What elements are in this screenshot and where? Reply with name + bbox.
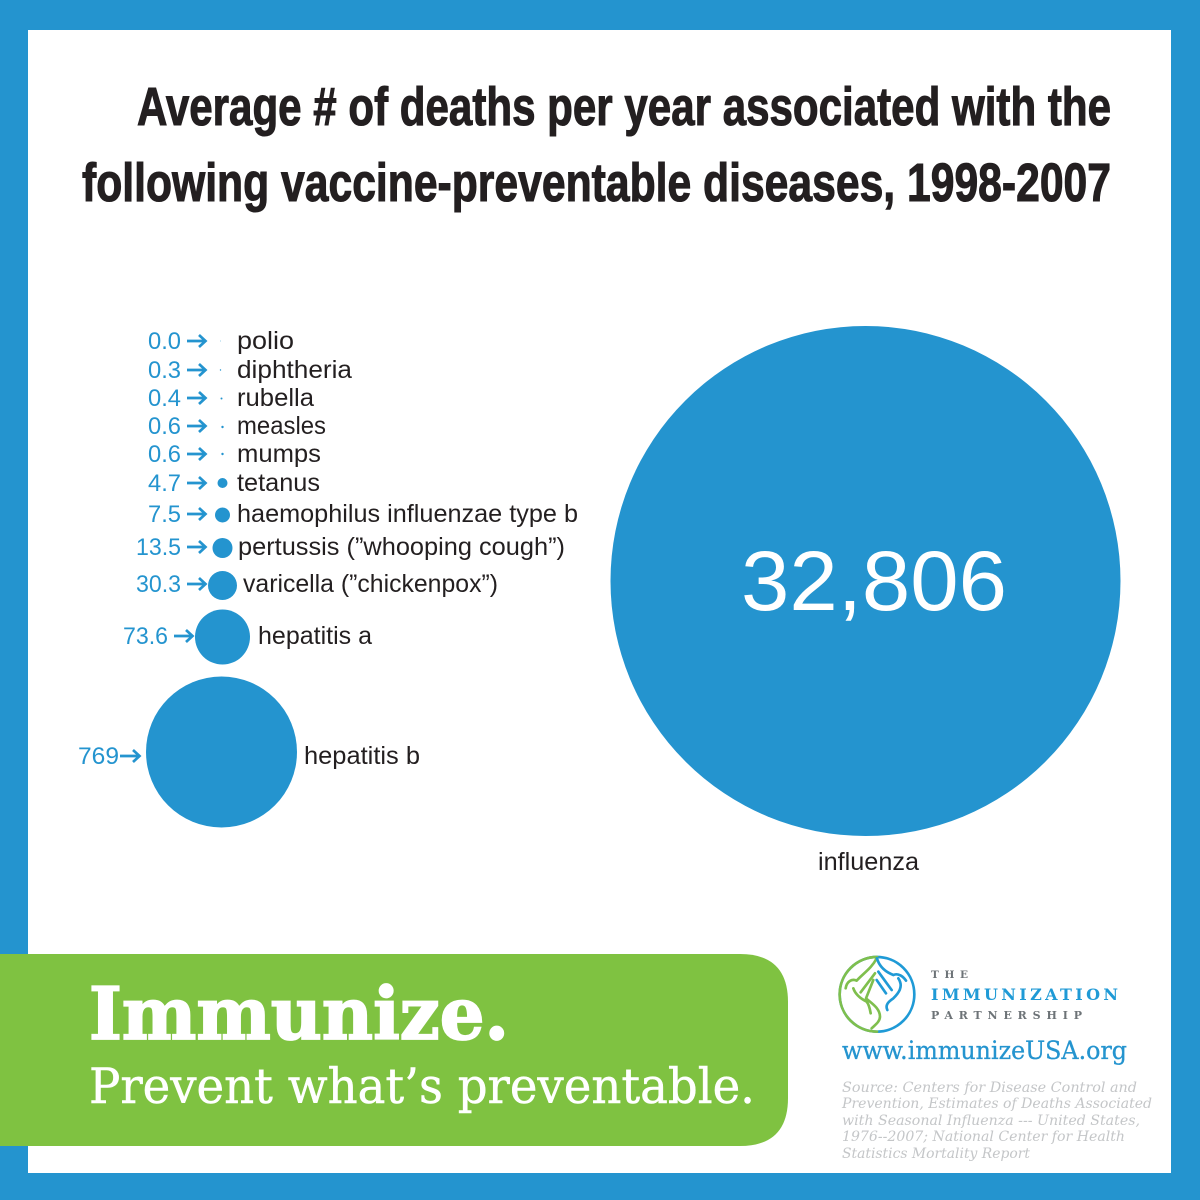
row: tetanus — [148, 469, 320, 497]
row: rubella: 0.4 — [148, 385, 181, 412]
logo wordmark: PARTNERSHIP — [931, 1009, 1082, 1022]
row: diphtheria: 0.3 — [148, 357, 181, 384]
row: varicella: 30.3 — [136, 571, 181, 598]
bubble: influenza: 32,806 — [741, 534, 1007, 628]
source note: Prevention, Estimates of Deaths Associated — [841, 1096, 1152, 1112]
source note: with Seasonal Influenza --- United States, — [842, 1113, 1140, 1129]
row: hepatitis b: 769 — [78, 743, 119, 770]
slogan text — [89, 971, 755, 1115]
label: influenza: influenza — [818, 848, 919, 876]
row: polio — [148, 327, 294, 355]
row: measles — [148, 412, 326, 440]
logo wordmark: IMMUNIZATION — [931, 985, 1118, 1004]
row: rubella — [148, 384, 314, 412]
logo icon: hands and leaf — [840, 957, 914, 1032]
row: hepatitis b: hepatitis b — [304, 742, 420, 770]
row: mumps: mumps — [237, 440, 321, 468]
row: haemophilus influenzae type b: haemophilus influenzae type b — [237, 500, 578, 528]
row: diphtheria — [148, 356, 352, 384]
row: tetanus: tetanus — [237, 469, 320, 497]
row: polio: 0.0 — [148, 328, 181, 355]
row: varicella: varicella (”chickenpox”) — [243, 570, 498, 598]
row: measles: measles — [237, 412, 326, 440]
row: varicella — [136, 570, 498, 600]
row: rubella: rubella — [237, 384, 314, 412]
source note: Source: Centers for Disease Control and — [842, 1080, 1137, 1096]
source note: Statistics Mortality Report — [842, 1146, 1030, 1162]
logo wordmark — [931, 969, 1118, 1022]
slogan text: Prevent what’s preventable. — [89, 1058, 755, 1115]
row: mumps: 0.6 — [148, 441, 181, 468]
row: pertussis: 13.5 — [136, 534, 181, 561]
slogan text: Immunize. — [89, 971, 509, 1056]
row: tetanus: 4.7 — [148, 470, 181, 497]
row: hepatitis a: 73.6 — [123, 623, 168, 650]
row: haemophilus influenzae type b: 7.5 — [148, 501, 181, 528]
row: hepatitis a: hepatitis a — [258, 622, 372, 650]
green banner — [0, 954, 788, 1146]
row: hepatitis b — [78, 676, 420, 828]
title — [82, 77, 1111, 213]
row: polio: polio — [237, 327, 294, 355]
row: pertussis: pertussis (”whooping cough”) — [238, 533, 565, 561]
row: mumps — [148, 440, 321, 468]
row: diphtheria: diphtheria — [237, 356, 352, 384]
source note — [841, 1080, 1152, 1162]
row: measles: 0.6 — [148, 413, 181, 440]
row: hepatitis a — [123, 610, 372, 664]
website url: www.immunizeUSA.org — [842, 1036, 1127, 1065]
bubble: influenza — [610, 326, 1120, 836]
source note: 1976--2007; National Center for Health — [842, 1129, 1125, 1145]
logo wordmark: THE — [931, 969, 968, 981]
